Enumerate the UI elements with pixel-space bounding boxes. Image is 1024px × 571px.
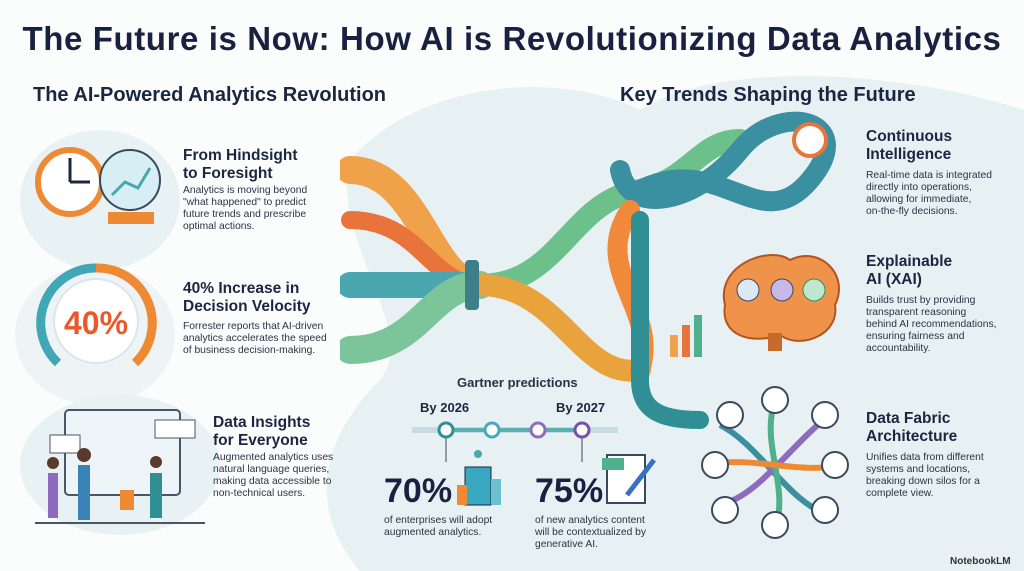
text: Unifies data from different	[866, 452, 984, 463]
text: Analytics is moving beyond	[183, 185, 307, 196]
item 2	[36, 264, 327, 366]
text	[866, 295, 997, 354]
heading: Intelligence	[866, 146, 951, 163]
heading: Data Insights	[213, 414, 310, 431]
text: of business decision-making.	[183, 345, 315, 356]
gartner predictions: of enterprises will adopt	[384, 515, 492, 526]
gartner predictions: of new analytics content	[535, 515, 645, 526]
title: The Future is Now: How AI is Revolutionizing Data Analytics	[22, 20, 1002, 57]
heading: 40% Increase in	[183, 280, 299, 297]
icon: 40% gauge	[36, 264, 157, 366]
text: optimal actions.	[183, 221, 255, 232]
item 1	[35, 147, 307, 232]
text: directly into operations,	[866, 182, 972, 193]
text: behind AI recommendations,	[866, 319, 997, 330]
heading: From Hindsight	[183, 147, 298, 164]
text	[213, 452, 333, 499]
text: transparent reasoning	[866, 307, 966, 318]
heading: for Everyone	[213, 432, 308, 449]
text	[866, 170, 992, 217]
heading: right section: Key Trends Shaping the Future	[620, 84, 916, 106]
item 3	[35, 409, 333, 524]
heading	[866, 410, 957, 445]
heading	[183, 147, 298, 182]
label: Gartner predictions	[457, 375, 578, 390]
timeline	[412, 422, 618, 462]
text	[183, 321, 327, 356]
icon: building	[457, 450, 501, 506]
heading: left section: The AI-Powered Analytics Revolution	[33, 84, 386, 106]
text: systems and locations,	[866, 464, 970, 475]
icon: people at whiteboard	[35, 409, 205, 524]
text: making data accessible to	[213, 476, 331, 487]
heading: Decision Velocity	[183, 298, 310, 315]
stat 75%: 75%	[535, 472, 603, 510]
watermark: NotebookLM	[950, 556, 1011, 567]
icon: 40% gauge: 40%	[64, 305, 128, 341]
icon: stopwatch and crystal ball	[35, 147, 161, 224]
text: future trends and prescribe	[183, 209, 306, 220]
text: analytics accelerates the speed	[183, 333, 327, 344]
text: Forrester reports that AI-driven	[183, 321, 323, 332]
icon: brain	[722, 254, 840, 351]
heading	[183, 280, 310, 315]
text: non-technical users.	[213, 488, 305, 499]
text: Real-time data is integrated	[866, 170, 992, 181]
icon: document pen	[602, 454, 656, 504]
gartner predictions: will be contextualized by	[535, 527, 646, 538]
text: generative AI.	[535, 539, 598, 550]
heading: Explainable	[866, 253, 952, 270]
heading: AI (XAI)	[866, 271, 922, 288]
heading: to Foresight	[183, 165, 273, 182]
heading	[866, 128, 952, 163]
trend 2	[866, 253, 997, 354]
gartner predictions: augmented analytics.	[384, 527, 481, 538]
text: "what happened" to predict	[183, 197, 306, 208]
text: Augmented analytics uses	[213, 452, 333, 463]
central pipes illustration	[340, 112, 836, 429]
text: accountability.	[866, 343, 930, 354]
heading	[213, 414, 310, 449]
text	[866, 452, 984, 499]
trend 1	[866, 128, 992, 217]
text: ensuring fairness and	[866, 331, 964, 342]
heading: Continuous	[866, 128, 952, 145]
years: By 2026	[420, 400, 469, 415]
text: breaking down silos for a	[866, 476, 980, 487]
heading: Architecture	[866, 428, 957, 445]
text: allowing for immediate,	[866, 194, 971, 205]
stat 70%: 70%	[384, 472, 452, 510]
heading: Data Fabric	[866, 410, 950, 427]
heading	[866, 253, 952, 288]
trend 3	[866, 410, 984, 499]
text: natural language queries,	[213, 464, 329, 475]
icon: data fabric mesh	[701, 386, 849, 539]
text: Builds trust by providing	[866, 295, 975, 306]
text: on-the-fly decisions.	[866, 206, 958, 217]
gartner predictions	[384, 375, 656, 550]
text: complete view.	[866, 488, 934, 499]
text	[183, 185, 307, 232]
gartner predictions: By 2027	[556, 400, 605, 415]
